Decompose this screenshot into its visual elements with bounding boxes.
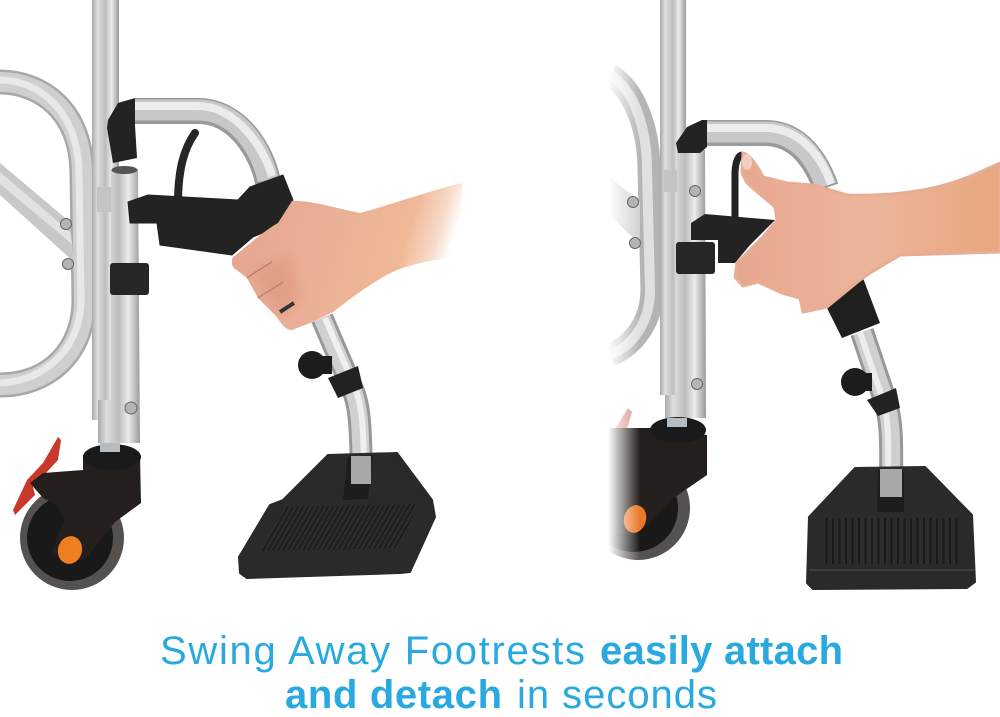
tube end in slot bbox=[880, 469, 902, 497]
hand pressing lever bbox=[735, 153, 1000, 312]
swivel disc bbox=[83, 444, 141, 470]
lower tube screw bbox=[125, 402, 137, 414]
cross bar highlight bbox=[0, 172, 72, 244]
tube end in slot bbox=[351, 456, 371, 484]
black handle bbox=[691, 214, 775, 263]
red brake remnant bbox=[616, 408, 632, 428]
caster wheel bbox=[20, 486, 124, 590]
caster fork bbox=[605, 428, 707, 535]
orange hub bbox=[624, 505, 646, 533]
black handle clamp bbox=[128, 175, 293, 255]
caption line 2 regular: in seconds bbox=[517, 673, 717, 717]
frame bolts bbox=[60, 218, 74, 270]
footplate lip bbox=[809, 569, 975, 571]
caption line 1 regular: Swing Away Footrests bbox=[160, 629, 585, 673]
adjustment knob bbox=[841, 368, 872, 396]
black pivot cap bbox=[107, 98, 137, 163]
lower footrest tube bbox=[322, 318, 365, 484]
caster wheel bbox=[610, 489, 690, 560]
release lever bbox=[178, 133, 195, 197]
front receiver tube bbox=[665, 150, 706, 418]
footplate tube slot bbox=[343, 455, 373, 500]
wheelchair side loop tube bbox=[610, 75, 652, 355]
caster swivel disc bbox=[650, 417, 706, 443]
adjustment knob bbox=[298, 351, 332, 379]
panel: right photo, pressing the lever bbox=[586, 0, 1000, 589]
caster fork bbox=[30, 455, 141, 565]
side connector bbox=[664, 170, 678, 192]
orange wheel hub bbox=[55, 533, 85, 567]
caption line 2 bold: and detach bbox=[285, 673, 502, 717]
finger gap shadow bbox=[280, 303, 294, 312]
lower footrest tube bbox=[860, 332, 891, 497]
tube collar bbox=[867, 388, 900, 416]
wheelchair side loop tube bbox=[0, 80, 84, 385]
diagonal cross bar bbox=[0, 163, 74, 262]
hand gripping bbox=[232, 183, 462, 330]
footplate bbox=[239, 453, 435, 578]
cross bar bbox=[614, 181, 640, 240]
brake lever bbox=[13, 437, 61, 515]
swivel bolt bbox=[100, 443, 120, 452]
front receiver tube bbox=[98, 167, 140, 443]
caption line 1 bold: easily attach bbox=[600, 629, 843, 673]
thumbnail bbox=[742, 154, 752, 170]
black pivot cap bbox=[676, 120, 707, 153]
caption bbox=[160, 629, 843, 717]
back frame pole bbox=[92, 0, 119, 420]
back frame pole bbox=[660, 0, 686, 395]
footplate tube slot bbox=[877, 470, 904, 512]
finger creases bbox=[247, 262, 283, 298]
faded frame parts bbox=[609, 66, 707, 560]
tube clip bbox=[676, 242, 715, 274]
top curved tube bbox=[135, 106, 272, 182]
panel: left photo, footrest being attached bbox=[0, 0, 462, 590]
loop tube highlight bbox=[610, 75, 650, 355]
tube collar bbox=[328, 366, 363, 398]
tube opening bbox=[112, 166, 138, 174]
top curved tube bbox=[707, 128, 831, 188]
footplate ribbed area bbox=[823, 518, 958, 564]
footplate ribs bbox=[260, 504, 418, 551]
release lever loop bbox=[735, 155, 742, 217]
side connector bbox=[97, 187, 112, 212]
hand shading bbox=[250, 255, 300, 318]
screws bbox=[690, 186, 702, 390]
swivel bolt bbox=[667, 418, 687, 427]
small tube clip bbox=[110, 263, 149, 295]
black foam grip bbox=[827, 278, 880, 338]
footplate bbox=[807, 467, 975, 589]
frame bolts bbox=[628, 196, 640, 248]
